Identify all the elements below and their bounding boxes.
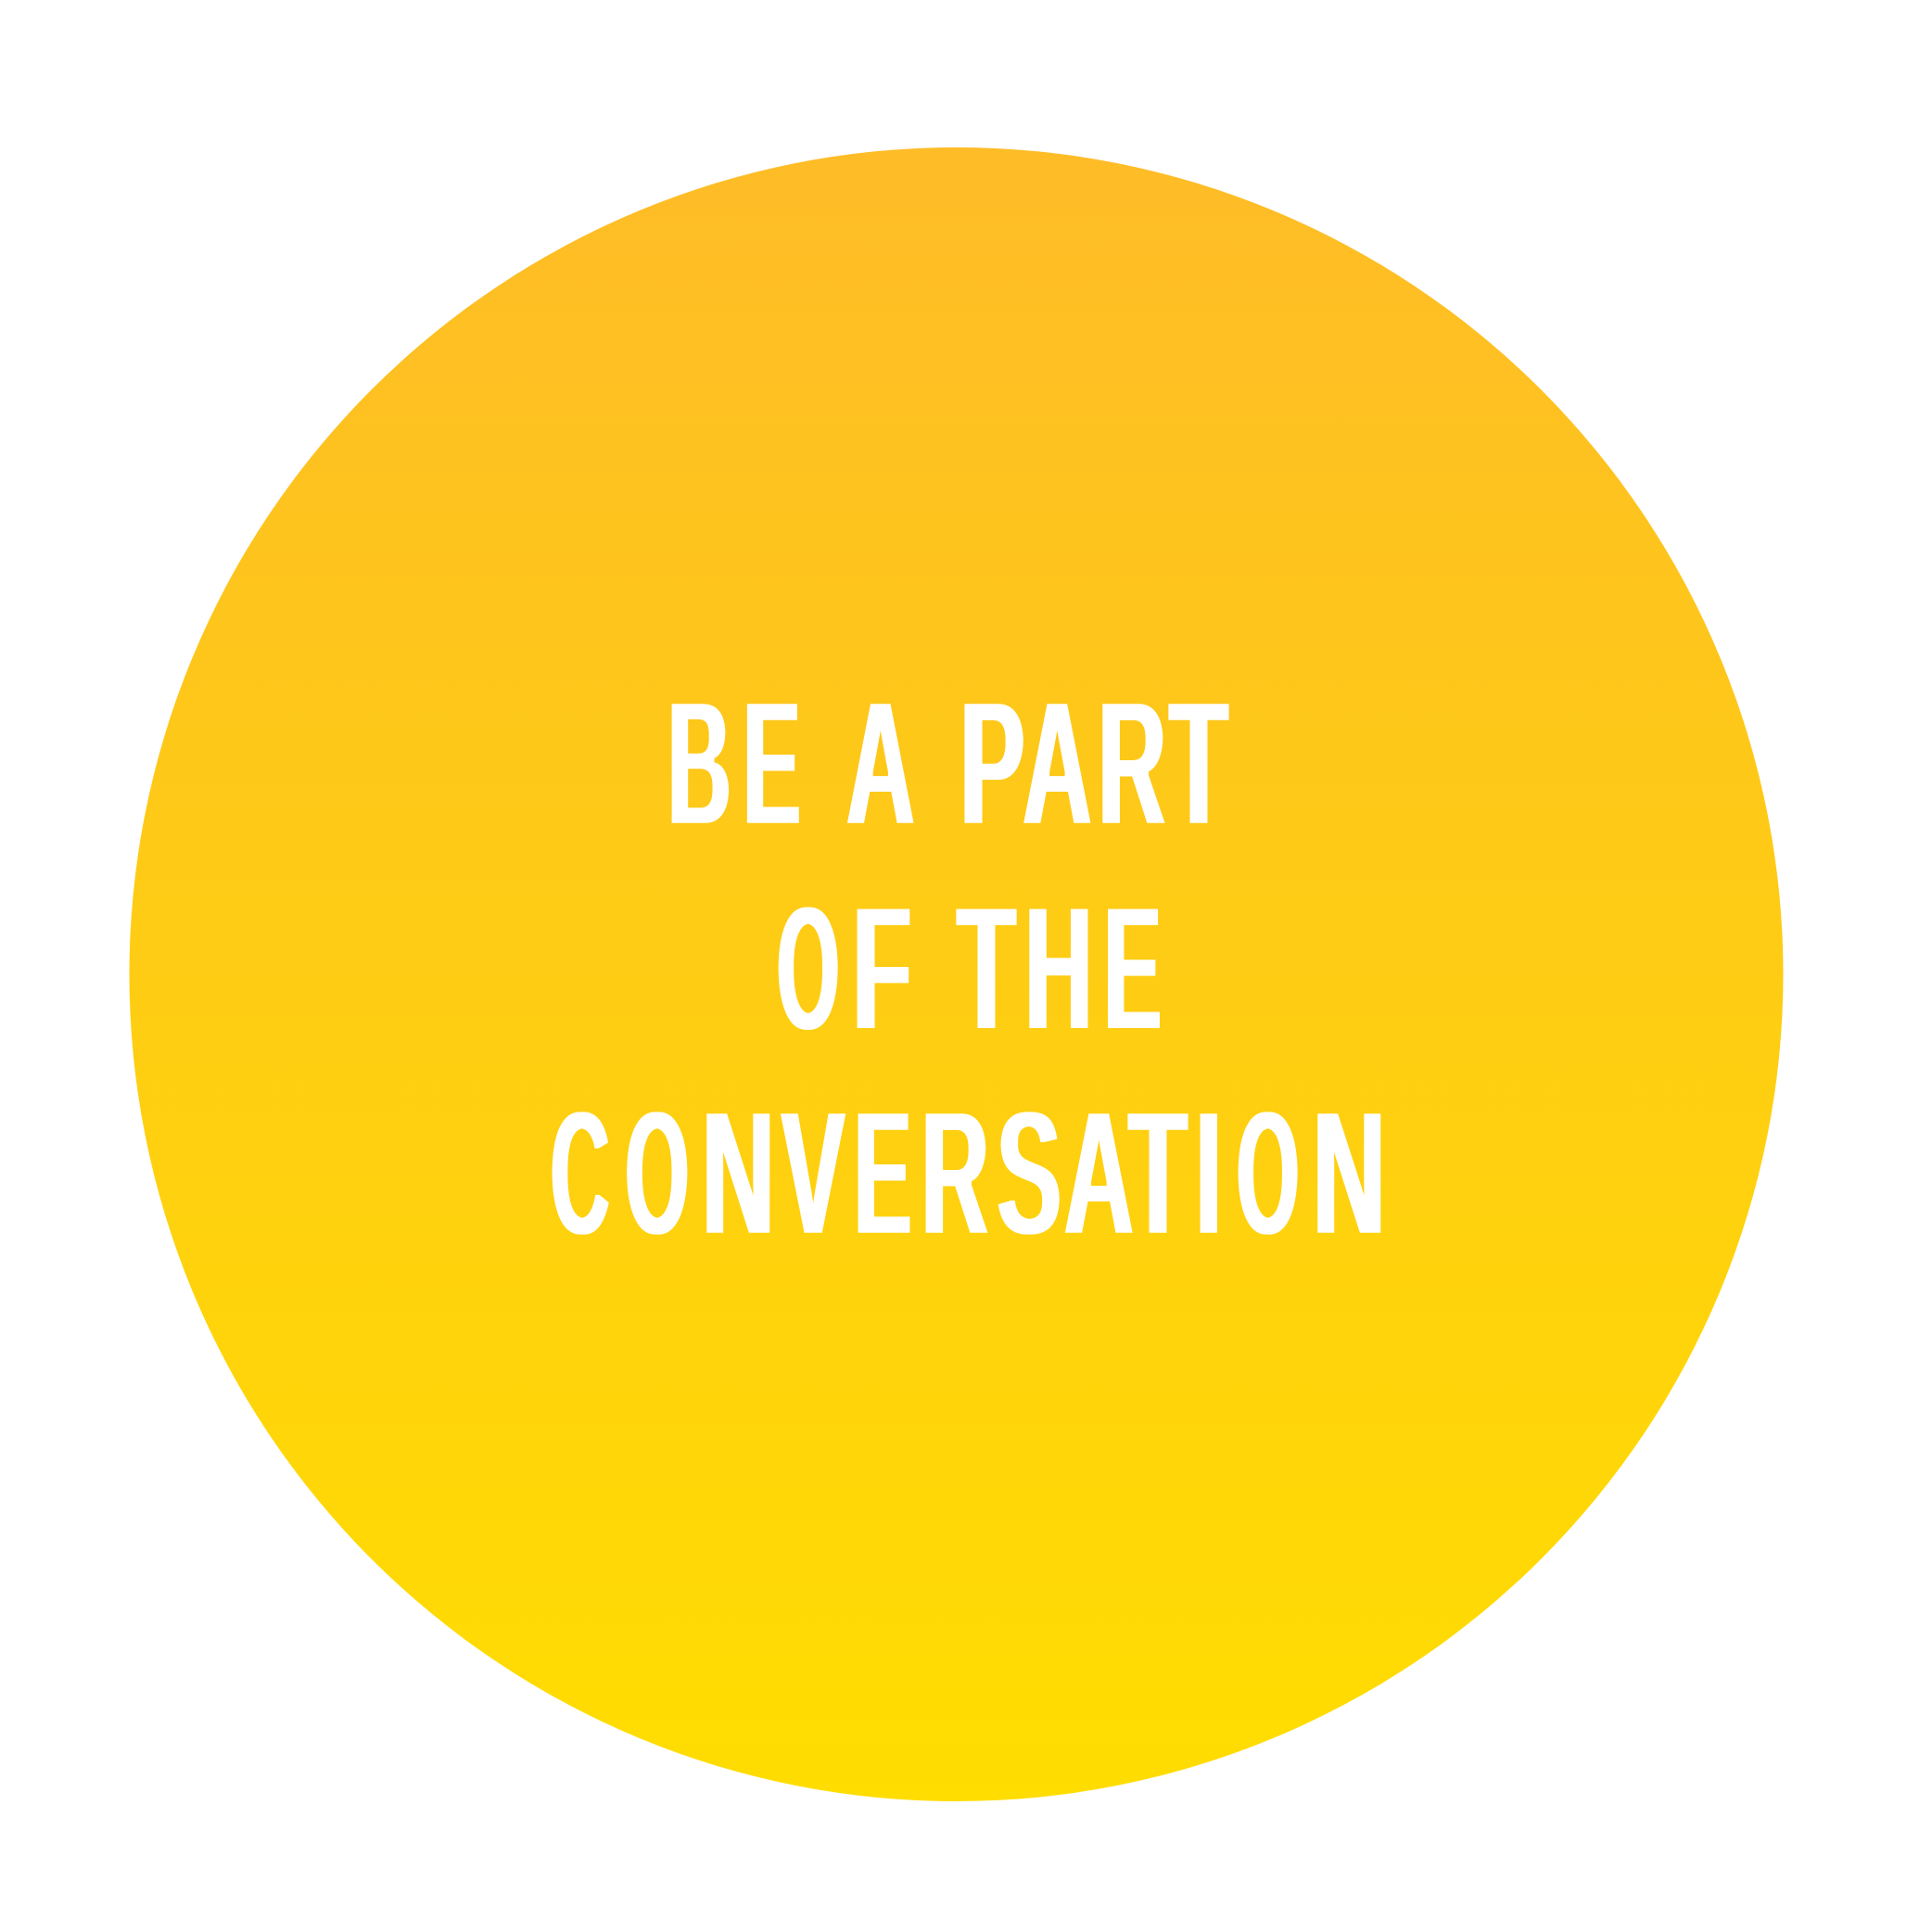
heading line: CONVERSATION: V	[781, 1074, 845, 1273]
heading line: CONVERSATION: C	[551, 1074, 610, 1273]
heading line: BE A PART: T	[1169, 664, 1228, 863]
heading line: CONVERSATION: O	[1237, 1074, 1299, 1273]
heading line: CONVERSATION: R	[922, 1074, 989, 1273]
heading line: CONVERSATION: S	[997, 1074, 1061, 1273]
heading line: BE A PART: E	[744, 664, 800, 863]
heading line: OF THE: E	[1104, 869, 1162, 1068]
heading line: OF THE	[777, 869, 1162, 1068]
heading line: OF THE: F	[853, 869, 911, 1068]
heading line: OF THE: O	[777, 869, 839, 1068]
heading line: CONVERSATION: I	[1196, 1074, 1222, 1273]
heading line: OF THE: T	[957, 869, 1016, 1068]
heading line: BE A PART: A	[846, 664, 915, 863]
heading line: CONVERSATION: T	[1128, 1074, 1188, 1273]
heading line: CONVERSATION: O	[625, 1074, 689, 1273]
heading line: CONVERSATION	[551, 1074, 1386, 1273]
heading line: OF THE: H	[1025, 869, 1092, 1068]
heading line: BE A PART: A	[1023, 664, 1092, 863]
heading line: BE A PART: R	[1098, 664, 1166, 863]
heading line: CONVERSATION: A	[1063, 1074, 1134, 1273]
heading line: CONVERSATION: E	[854, 1074, 911, 1273]
heading line: BE A PART	[667, 664, 1228, 863]
heading line: CONVERSATION: N	[702, 1074, 775, 1273]
gradient circle	[130, 147, 1784, 1801]
heading line: CONVERSATION: N	[1313, 1074, 1386, 1273]
heading line: BE A PART: B	[667, 664, 731, 863]
heading line: BE A PART: P	[960, 664, 1024, 863]
